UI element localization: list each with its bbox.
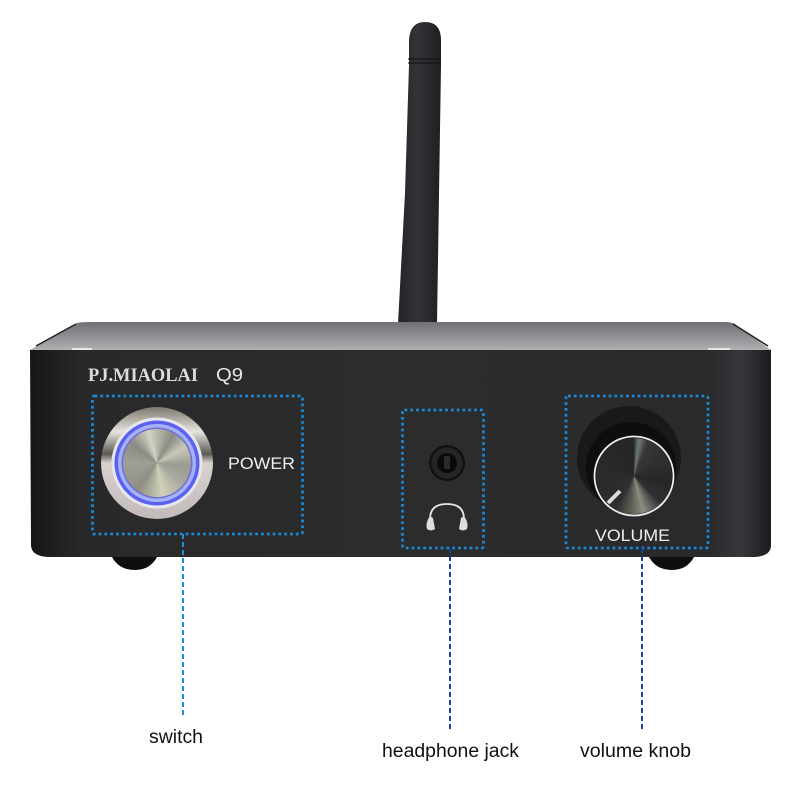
top panel — [30, 322, 771, 350]
icon: headphones — [426, 504, 468, 530]
amplifier body — [30, 322, 771, 570]
brand logo: PJ.MIAOLAI — [88, 365, 198, 386]
POWER label: POWER — [228, 455, 295, 473]
callout box: volume knob — [566, 396, 708, 548]
leader line: switch — [182, 534, 184, 716]
leader line: volume knob — [641, 548, 643, 731]
VOLUME label: VOLUME — [595, 526, 670, 545]
label: volume knob: volume knob — [580, 741, 691, 762]
headphone jack — [429, 445, 465, 481]
leader line: headphone jack — [449, 548, 451, 731]
right foot — [649, 557, 694, 570]
left foot — [112, 557, 157, 570]
front panel — [30, 350, 771, 557]
antenna — [398, 22, 441, 324]
power switch — [101, 407, 213, 519]
volume knob — [577, 406, 681, 516]
label: headphone jack: headphone jack — [382, 741, 520, 762]
callout box: switch — [92, 396, 302, 534]
model name: Q9 — [216, 364, 243, 385]
callout box: headphone jack — [402, 410, 484, 548]
label: switch: switch — [149, 727, 203, 748]
